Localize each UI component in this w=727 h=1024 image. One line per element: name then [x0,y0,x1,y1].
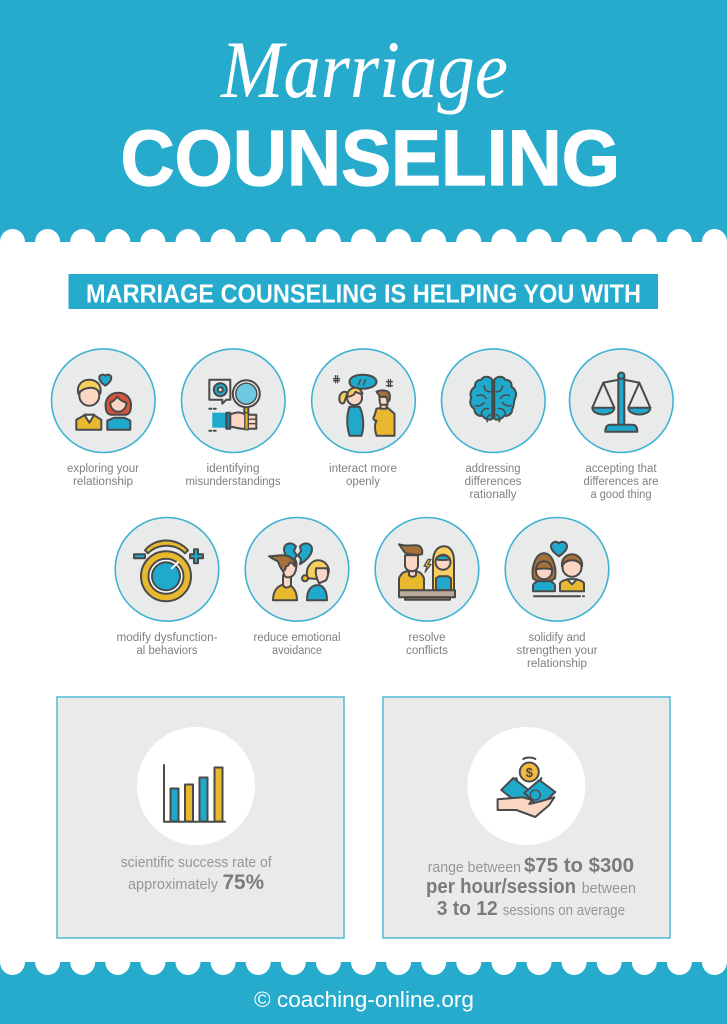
label: reduce emotional [254,632,340,644]
item: interact more openly [312,349,415,488]
cost text: per hour/session [426,876,576,898]
label: relationship [527,658,587,670]
label: al behaviors [136,645,198,657]
label [464,463,522,501]
icon: couple with heart [76,375,131,430]
icon: broken heart and separated couple [269,543,329,600]
label [329,463,397,488]
panel: cost [383,697,670,938]
label [186,463,281,488]
label: conflicts [406,645,448,657]
label: modify dysfunction- [116,632,218,644]
label [584,463,658,501]
item: identifying misunderstandings [182,349,285,488]
icon: bar chart [164,765,225,822]
label: differences are [584,476,658,488]
header band [0,0,727,242]
cost text: $75 to $300 [524,855,634,877]
panel: success rate [57,697,344,938]
label: a good thing [590,489,652,501]
label [67,463,139,488]
item: reduce emotional avoidance [245,518,349,657]
title: COUNSELING: COUNSELING [120,113,620,202]
label: accepting that [586,463,657,475]
icon: dial [134,541,203,601]
icon: brain [470,377,516,422]
item: solidify and strengthen your relationship [505,518,609,670]
icon: magnifier and hand [209,380,260,431]
icon: couple at table [399,544,455,600]
label [516,632,598,670]
cost text: 3 to 12 [437,898,498,920]
cost text [426,855,636,920]
item: resolve conflicts [375,518,479,657]
label: solidify and [528,632,586,644]
cost text: range between [428,860,521,876]
icon: money in hand [498,758,555,817]
icon: couple with heart [533,542,584,596]
success rate text: approximately [128,877,219,893]
item: modify dysfunctional behaviors [115,518,219,657]
item: accepting that differences are a good thing [570,349,673,501]
label: misunderstandings [186,476,281,488]
label: exploring your [67,463,139,475]
label: openly [346,476,380,488]
footer credit: © coaching-online.org [254,987,474,1012]
success rate text [121,855,273,894]
label: relationship [73,476,133,488]
icon: two people talking [334,375,394,436]
label: differences [464,476,522,488]
label: rationally [470,489,517,501]
label [406,632,448,657]
cost text: between [582,881,636,897]
item: addressing differences rationally [442,349,545,501]
label [116,632,218,657]
success rate text: 75% [222,871,264,894]
icon: balance scale [592,372,650,432]
label: addressing [466,463,520,475]
title: Marriage: Marriage [220,24,508,115]
footer band [0,960,727,1024]
icon: money in hand: $ [526,765,534,780]
label: avoidance [272,645,322,657]
section heading bar: MARRIAGE COUNSELING IS HELPING YOU WITH [86,280,641,308]
label: identifying [206,463,260,475]
label [254,632,340,657]
header scalloped edge [0,229,727,244]
label: interact more [329,463,397,475]
cost text: sessions on average [503,903,625,919]
success rate text: scientific success rate of [121,855,273,871]
label: strengthen your [516,645,598,657]
item: exploring your relationship [52,349,155,488]
label: resolve [408,632,446,644]
